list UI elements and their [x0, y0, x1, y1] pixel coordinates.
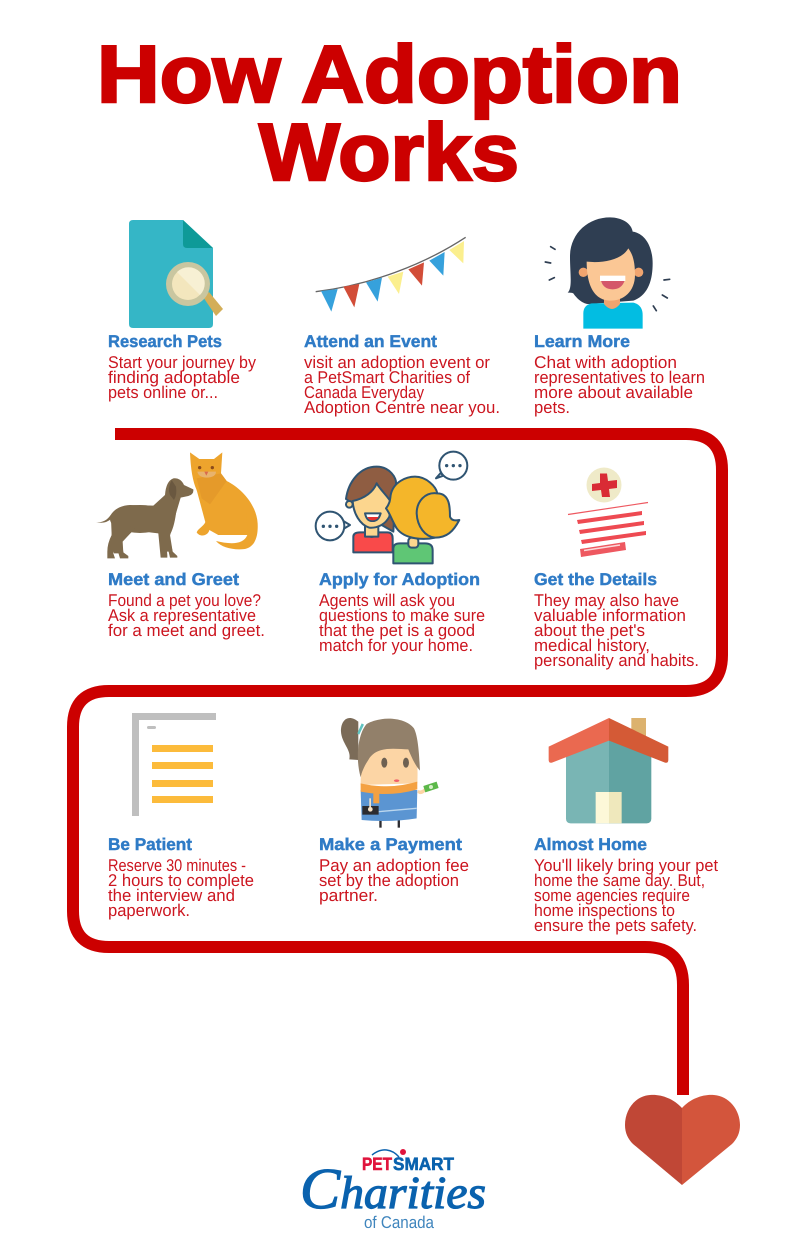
- text block: that the pet is a good: [319, 621, 475, 640]
- winding path line: [73, 434, 722, 1095]
- icon: smiling woman: [545, 217, 670, 329]
- step: learn more: [534, 217, 705, 417]
- text block: set by the adoption: [319, 871, 459, 890]
- icon: medical form: [568, 468, 648, 557]
- text block: more about available: [534, 383, 693, 402]
- icon: heart: [625, 1095, 740, 1185]
- text block: Reserve 30 minutes -: [108, 856, 246, 875]
- step: meet and greet: [96, 452, 265, 640]
- text block: home inspections to: [534, 901, 675, 920]
- text block: [319, 591, 485, 655]
- step: research pets: [108, 220, 256, 402]
- text block: some agencies require: [534, 886, 690, 905]
- text block: the interview and: [108, 886, 235, 905]
- text block: ensure the pets safety.: [534, 916, 697, 935]
- text block: a PetSmart Charities of: [304, 368, 470, 387]
- step: apply for adoption: [316, 452, 485, 655]
- text block: 2 hours to complete: [108, 871, 254, 890]
- icon: dog and cat: [96, 452, 258, 558]
- text block: about the pet's: [534, 621, 645, 640]
- logo: PetSmart Charities of Canada: PET: [362, 1154, 392, 1174]
- text block: Chat with adoption: [534, 353, 677, 372]
- text block: questions to make sure: [319, 606, 485, 625]
- text block: [319, 856, 469, 905]
- title: [97, 30, 682, 198]
- step: be patient: [108, 713, 254, 920]
- icon: house: [549, 718, 668, 823]
- heading: Apply for Adoption: [319, 570, 480, 589]
- text block: [108, 591, 265, 640]
- text block: [534, 856, 718, 935]
- title: Works: [259, 108, 519, 198]
- icon: two people talking: [316, 452, 467, 563]
- text block: Adoption Centre near you.: [304, 398, 500, 417]
- text block: for a meet and greet.: [108, 621, 265, 640]
- text block: match for your home.: [319, 636, 473, 655]
- text block: medical history,: [534, 636, 650, 655]
- text block: [304, 353, 500, 417]
- title: How Adoption: [97, 30, 682, 120]
- heading: Attend an Event: [304, 332, 437, 351]
- logo: PetSmart Charities of Canada: of Canada: [364, 1213, 434, 1232]
- text block: partner.: [319, 886, 378, 905]
- text block: Canada Everyday: [304, 383, 424, 402]
- text block: [108, 353, 256, 402]
- text block: finding adoptable: [108, 368, 240, 387]
- step: attend an event: [304, 237, 500, 417]
- text block: [108, 856, 254, 920]
- text block: Start your journey by: [108, 353, 256, 372]
- text block: Pay an adoption fee: [319, 856, 469, 875]
- icon: document with magnifier: [129, 220, 223, 328]
- text block: pets online or...: [108, 383, 218, 402]
- text block: paperwork.: [108, 901, 190, 920]
- text block: visit an adoption event or: [304, 353, 490, 372]
- logo: PetSmart Charities of Canada: Charities: [300, 1156, 486, 1221]
- icon: bunting: [316, 237, 466, 312]
- heading: Learn More: [534, 332, 630, 351]
- text block: You'll likely bring your pet: [534, 856, 718, 875]
- text block: personality and habits.: [534, 651, 699, 670]
- text block: Agents will ask you: [319, 591, 455, 610]
- step: almost home: [534, 718, 718, 935]
- icon: paperwork sheet: [132, 713, 216, 816]
- heading: Be Patient: [108, 835, 192, 854]
- text block: Found a pet you love?: [108, 591, 261, 610]
- step: make a payment: [319, 718, 469, 905]
- logo: PetSmart Charities of Canada: SMART: [393, 1154, 454, 1174]
- text block: Ask a representative: [108, 606, 256, 625]
- text block: home the same day. But,: [534, 871, 705, 890]
- step: get the details: [534, 468, 699, 670]
- text block: They may also have: [534, 591, 679, 610]
- text block: [534, 353, 705, 417]
- heading: Research Pets: [108, 332, 222, 351]
- heading: Meet and Greet: [108, 570, 239, 589]
- text block: [534, 591, 699, 670]
- text block: valuable information: [534, 606, 686, 625]
- icon: girl holding money: [341, 718, 439, 828]
- text block: representatives to learn: [534, 368, 705, 387]
- heading: Make a Payment: [319, 835, 462, 854]
- heading: Get the Details: [534, 570, 657, 589]
- text block: pets.: [534, 398, 570, 417]
- heading: Almost Home: [534, 835, 647, 854]
